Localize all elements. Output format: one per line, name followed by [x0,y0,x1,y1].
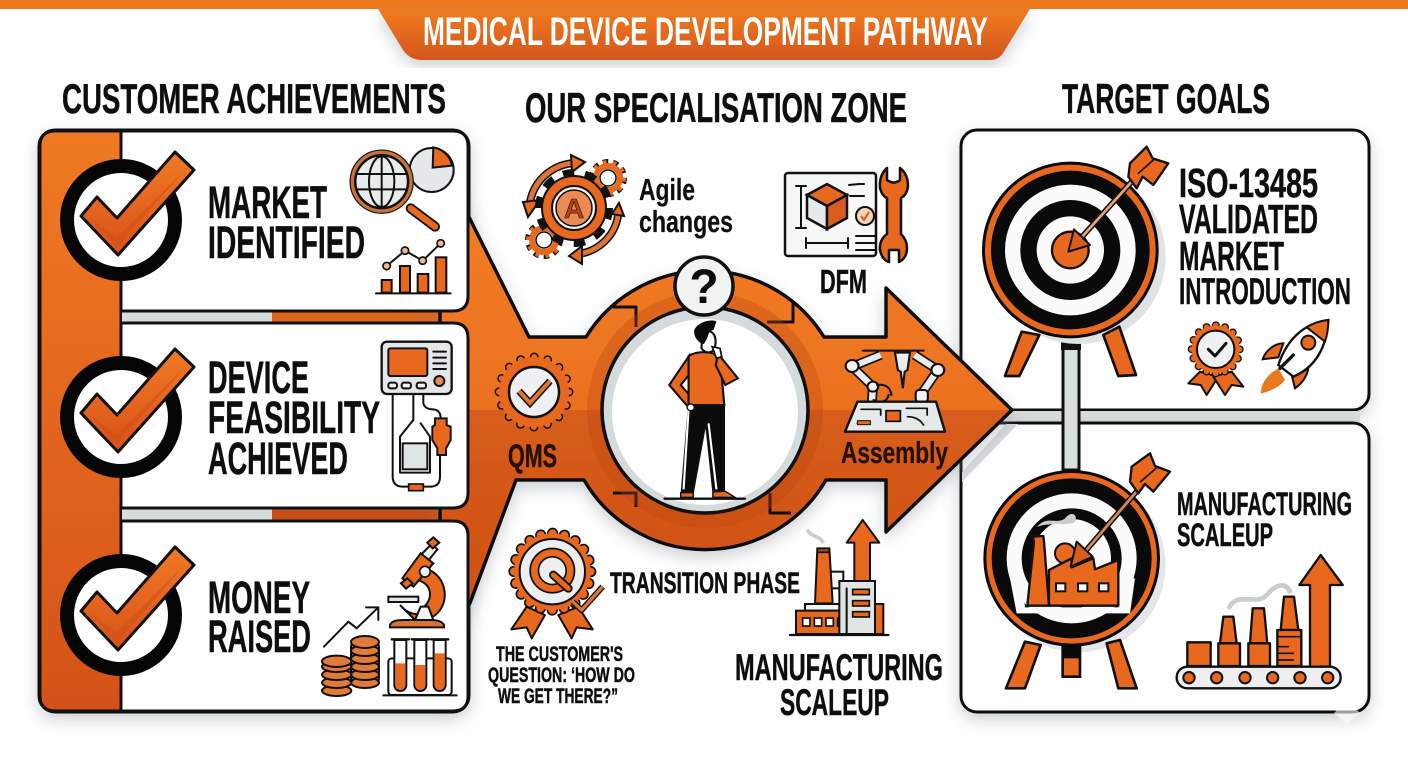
corner watermark [1334,700,1360,724]
text: ISO-13485 validated market introduction [1179,160,1351,312]
text: customer's question [488,643,635,708]
icon: rocket [1261,320,1328,393]
text: ISO-13485 validated market introduction: ISO-13485 [1179,160,1318,206]
check badge 2 [67,349,194,471]
text: money raised: RAISED [208,611,311,662]
vertical pole connecting targets [1061,338,1081,470]
wrench [880,168,908,262]
icon: magnifier, globe and pie [352,147,454,227]
icon: factory with arrow [790,520,888,635]
icon: microscope [388,537,445,627]
top bar [0,0,1408,9]
check badge 1 [67,152,194,274]
question mark bubble: ? [689,261,719,314]
card: money raised [121,521,468,711]
text: market identified: MARKET [208,177,327,228]
card: device feasibility [121,323,468,508]
icon: quality Q ribbon [511,533,603,638]
icon: target with factory [983,453,1170,688]
text: agile changes: Agile [639,172,695,207]
heading: our specialisation zone: OUR SPECIALISATION ZONE [525,84,907,131]
text: manufacturing scaleup right [1177,486,1352,553]
text: agile changes: changes [639,204,733,239]
icon: test tubes in rack [383,639,457,695]
icon: agile gears [523,155,624,264]
text: manufacturing scaleup centre: MANUFACTURING [735,647,943,688]
small gear bottom [529,225,559,255]
central circle with thinking person [602,307,808,513]
icon: target with arrow [982,147,1168,376]
text: agile changes [639,172,733,239]
card: ISO market introduction [961,130,1369,410]
panel: customer achievements background [39,130,469,712]
orange column [40,131,121,711]
text: transition phase: TRANSITION PHASE [610,567,800,600]
text: market identified: IDENTIFIED [208,217,365,268]
text: ISO-13485 validated market introduction: VALIDATED [1179,196,1318,242]
icon: certification rosette [1188,325,1243,395]
main gear: A [564,193,584,224]
text: device feasibility achieved [208,352,380,484]
gap strip 1 [122,311,469,323]
text: ISO-13485 validated market introduction: MARKET [1179,233,1284,279]
text: manufacturing scaleup right: SCALEUP [1177,517,1273,553]
person figure [665,321,745,499]
title banner: MEDICAL DEVICE DEVELOPMENT PATHWAY [423,10,988,54]
ring notches [594,299,816,521]
text: customer's question: WE GET THERE?” [498,685,618,708]
card: market identified [121,131,468,311]
cycle arrows [523,155,624,264]
text: assembly: Assembly [841,435,949,470]
small gear top [593,163,623,193]
text: money raised [208,572,311,662]
cards: customer achievements [121,131,468,711]
gap strip 2 [122,508,469,521]
panel: target goals [961,130,1369,712]
heading: target goals: TARGET GOALS [1062,75,1270,122]
text: device feasibility achieved: FEASIBILITY [208,392,380,443]
text: market identified [208,177,365,268]
title banner [378,9,1030,60]
text: DFM: DFM [820,263,867,300]
text: manufacturing scaleup centre [735,647,943,723]
icon: QMS seal [499,357,569,427]
connector strip between goal cards [1000,411,1360,422]
card: manufacturing scaleup [961,423,1369,712]
main arrow through specialisation ring [440,160,1012,650]
icon: robotic assembly [845,351,945,432]
icon: conveyor scaleup with arrow [1177,555,1343,688]
text: QMS: QMS [508,438,557,474]
text: money raised: MONEY [208,572,310,623]
question mark bubble [675,257,733,315]
icon: bar chart with trend [376,240,451,293]
text: manufacturing scaleup centre: SCALEUP [780,682,889,723]
text: customer's question: THE CUSTOMER'S [496,643,623,666]
icon: coin stacks with growth arrow [322,607,379,696]
icon: DFM blueprint and wrench [785,168,908,262]
arrow shadow on card [962,424,1018,482]
check badge 3 [67,547,194,669]
text: customer's question: QUESTION: ‘HOW DO [488,664,635,687]
text: device feasibility achieved: ACHIEVED [208,433,348,484]
heading: customer achievements: CUSTOMER ACHIEVEMENTS [62,75,446,122]
text: device feasibility achieved: DEVICE [208,352,309,403]
icon: medical device with tubing [382,342,452,491]
